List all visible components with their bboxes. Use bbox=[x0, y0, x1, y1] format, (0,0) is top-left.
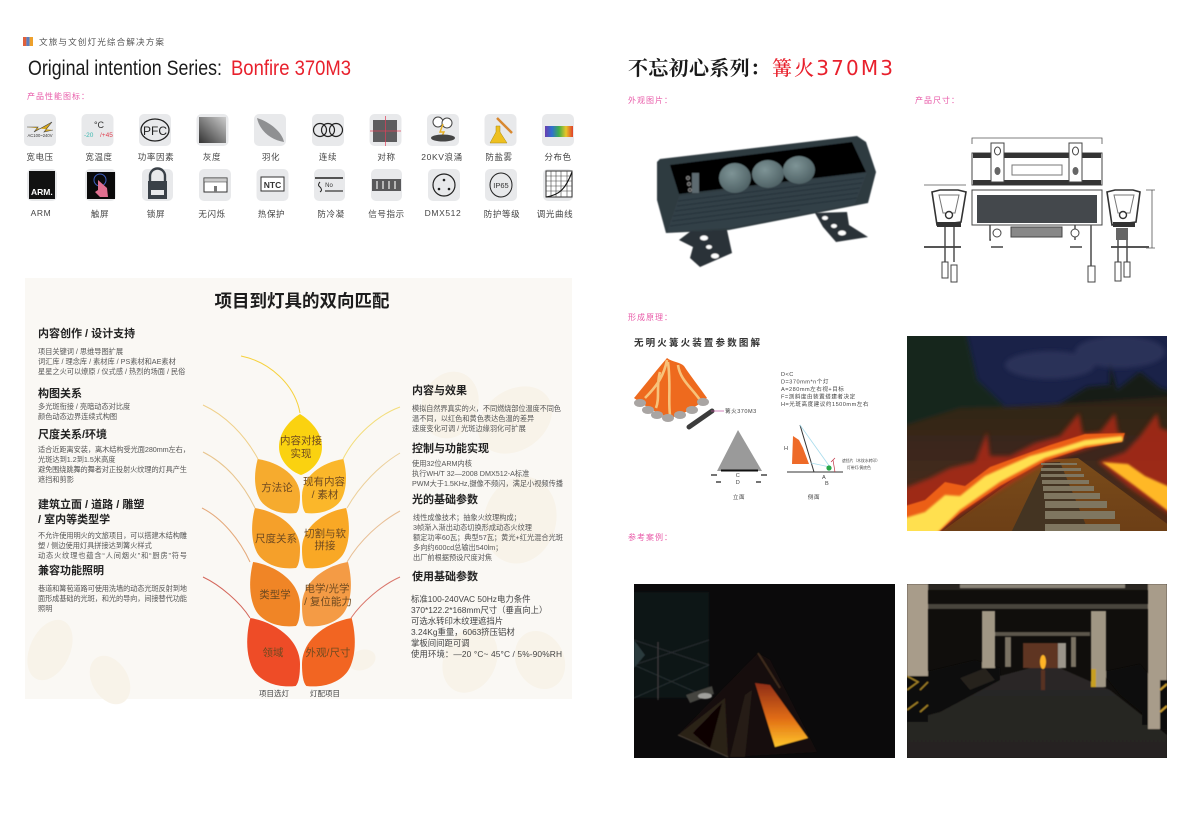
section label: appearance: 外观图片： bbox=[628, 95, 673, 105]
icon: wide temperature: /+45 bbox=[100, 132, 113, 139]
icon labels: 信号指示 bbox=[368, 209, 405, 219]
right text column: 3帧渐入渐出动态切换形成动态火纹理 bbox=[413, 523, 532, 532]
right text column: 370*122.2*168mm尺寸（垂直向上） bbox=[411, 605, 547, 615]
icon labels: DMX512 bbox=[425, 208, 461, 218]
icon: symmetry bbox=[370, 116, 401, 146]
right text column: 执行WH/T 32—2008 DMX512-A标准 bbox=[412, 469, 529, 478]
right text column: 控制与功能实现 bbox=[412, 441, 489, 455]
icon: DMX512 bbox=[433, 174, 455, 196]
wheat labels: 领域 bbox=[262, 646, 284, 659]
right text column: 标准100-240VAC 50Hz电力条件 bbox=[411, 594, 530, 604]
icon labels: 热保护 bbox=[258, 209, 285, 219]
side section diagram: H bbox=[784, 446, 789, 452]
wheat labels: 拼接 bbox=[314, 539, 336, 552]
icon labels: 防盐雾 bbox=[485, 152, 513, 162]
left side view bbox=[924, 185, 966, 282]
wheat labels: / 复位能力 bbox=[304, 595, 352, 608]
parameter notes: A=280mm左右视+目标 bbox=[781, 385, 844, 393]
section label: reference cases: 参考案例： bbox=[628, 532, 673, 542]
icon labels: 宽电压 bbox=[26, 152, 54, 162]
photo: fire road bbox=[907, 336, 1167, 531]
icon labels: ARM bbox=[31, 208, 51, 218]
icon: dimming curve bbox=[546, 171, 572, 197]
wheat labels: 切割与软 bbox=[304, 527, 346, 540]
left text column: 构图关系 bbox=[38, 386, 82, 400]
icon labels: 对称 bbox=[377, 152, 396, 162]
right text column: 使用32位ARM内核 bbox=[412, 459, 472, 468]
icon labels: 羽化 bbox=[262, 152, 280, 162]
left text column: 多光斑衔接 / 亮暗动态对比度 bbox=[38, 402, 130, 411]
product photo: lamp bbox=[657, 136, 876, 267]
wheat diagram bbox=[202, 356, 400, 698]
wheat labels: 电学/光学 bbox=[305, 582, 349, 595]
elevation triangle: C bbox=[736, 473, 740, 479]
parameter notes: D=370mm*n个灯 bbox=[781, 378, 829, 386]
side section diagram bbox=[784, 425, 880, 501]
icon labels: 调光曲线 bbox=[537, 209, 573, 219]
right text column: 出厂前根据预设尺度对焦 bbox=[413, 553, 492, 562]
section label: dimensions: 产品尺寸： bbox=[915, 95, 960, 105]
wheat labels: 外观/尺寸 bbox=[306, 646, 350, 659]
icon labels: 灰度 bbox=[203, 152, 221, 162]
icon: anti condensation bbox=[315, 178, 343, 192]
side section diagram: B bbox=[825, 481, 829, 487]
wheat labels: 项目选灯 bbox=[259, 688, 289, 698]
left text column: 避免围绕跳舞的舞者对正投射火纹理的灯具产生 bbox=[38, 465, 187, 474]
wheat labels: 现有内容 bbox=[303, 475, 345, 488]
right text column: 模拟自然界真实的火，不同燃烧部位温度不同色 bbox=[412, 404, 561, 413]
side section diagram: 遮挡片（木纹水转印） bbox=[842, 458, 880, 463]
right text column: 使用基础参数 bbox=[412, 569, 478, 583]
elevation triangle bbox=[711, 430, 767, 501]
parameter notes: H=光斑高度建议约1500mm左右 bbox=[781, 400, 869, 408]
parameter notes: D<C bbox=[781, 372, 794, 378]
icon labels: 分布色 bbox=[544, 152, 572, 162]
icon labels: 无闪烁 bbox=[198, 209, 226, 219]
right text column: 光的基础参数 bbox=[412, 492, 478, 506]
right text column: 速度变化可调 / 光斑边缘羽化可扩展 bbox=[412, 424, 526, 433]
icon: power factor bbox=[141, 119, 169, 141]
wheat leaves bbox=[247, 414, 355, 686]
icon labels: 功率因素 bbox=[138, 152, 174, 162]
left text column: 巷道和篝苞道路可使用洗墙的动态光斑反射到地 bbox=[38, 584, 187, 593]
title: english: Original intention Series: bbox=[28, 57, 222, 80]
top view bbox=[972, 138, 1102, 185]
icon: wide temperature bbox=[84, 120, 113, 139]
icon: power factor: PFC bbox=[143, 124, 167, 138]
title: english: Bonfire 370M3 bbox=[231, 57, 351, 80]
left text column: 颜色动态边界连续式构图 bbox=[38, 412, 117, 421]
icon: anti condensation: No bbox=[325, 183, 333, 189]
icon labels: 防冷凝 bbox=[317, 209, 345, 219]
left text column: 项目关键词 / 思维导图扩展 bbox=[38, 347, 123, 356]
left text column: 星星之火可以燎原 / 仪式感 / 热烈的场面 / 民俗 bbox=[38, 367, 185, 376]
icon: ARM bbox=[29, 171, 55, 199]
right text column: 温不同，以红色和黄色表达色温的差异 bbox=[412, 414, 534, 423]
left text column: 光斑达到1.2到1.5米高度 bbox=[38, 455, 115, 464]
left text column: 遮挡和剪影 bbox=[38, 475, 74, 484]
wheat labels: / 素材 bbox=[312, 488, 339, 501]
left text column bbox=[38, 326, 190, 613]
flames bbox=[900, 413, 1172, 535]
left text column: 词汇库 / 理念库 / 素材库 / PS素材和AE素材 bbox=[38, 357, 176, 366]
icon labels: 锁屏 bbox=[147, 209, 165, 219]
right text column bbox=[411, 383, 563, 659]
wheat labels: 类型学 bbox=[259, 588, 291, 601]
icon labels: 连续 bbox=[319, 152, 337, 162]
icon: touch bbox=[87, 172, 115, 199]
icon: colour distribution bbox=[545, 126, 573, 137]
wheat labels: 尺度关系 bbox=[255, 532, 297, 545]
icon: wide voltage: AC100~240V bbox=[27, 133, 53, 138]
icon labels bbox=[26, 152, 573, 219]
left text column: 面形成基础的光斑，和光的导向，间接替代功能 bbox=[38, 594, 187, 603]
icon: NTC bbox=[261, 177, 284, 191]
icon: no flicker bbox=[204, 178, 227, 192]
title: chinese bbox=[628, 56, 893, 80]
fire cone illustration bbox=[634, 358, 757, 427]
side section diagram: 灯带灯/黄底色 bbox=[847, 465, 871, 470]
parameter notes: F=测斜度由装置搭建者决定 bbox=[781, 392, 856, 400]
diagram title: 无明火篝火装置参数图解 bbox=[634, 337, 760, 349]
elevation triangle: D bbox=[736, 480, 740, 486]
right text column: 使用环境：—20 °C~ 45°C / 5%-90%RH bbox=[411, 649, 562, 659]
icon labels: 20KV浪涌 bbox=[421, 152, 463, 162]
left text column: 不允许使用明火的文旅项目，可以搭建木结构雕 bbox=[38, 531, 187, 540]
left text column: 适合近距离安装，离木结构受光面280mm左右， bbox=[38, 445, 190, 454]
right side view bbox=[1107, 190, 1155, 281]
side section diagram: A bbox=[822, 475, 826, 481]
right text column: 额定功率60瓦；典型57瓦；黄光+红光混合光斑 bbox=[413, 533, 563, 542]
right text column: PWM大于1.5KHz,摄像不频闪，满足小视频传播 bbox=[412, 479, 563, 488]
icon labels: 触屏 bbox=[91, 209, 109, 219]
icon labels: 宽温度 bbox=[85, 152, 113, 162]
wheat labels: 实现 bbox=[290, 447, 312, 460]
right text column: 线性成像技术；抽象火纹理构成； bbox=[413, 513, 521, 522]
fire cone illustration: 篝火370M3 bbox=[725, 407, 757, 415]
icon: ARM: ARM. bbox=[31, 187, 53, 197]
photo: underground car park bbox=[907, 584, 1167, 758]
panel: two-way matching bbox=[18, 278, 574, 712]
left text column: 兼容功能照明 bbox=[38, 563, 104, 577]
header tag: 文旅与文创灯光综合解决方案 bbox=[39, 36, 164, 47]
left text column: 动态火纹理也蕴含“人间烟火”和“厨房”符号 bbox=[38, 551, 187, 560]
wheat labels bbox=[255, 434, 352, 698]
icon: continuous rings bbox=[314, 124, 342, 136]
photo: pyramid bonfire bbox=[634, 584, 895, 758]
right text column: 可选水转印木纹理遮挡片 bbox=[411, 616, 503, 626]
dimension drawing bbox=[924, 138, 1155, 282]
left text column: 照明 bbox=[38, 604, 52, 613]
icon: wide voltage bbox=[27, 122, 53, 138]
title: chinese: 不忘初心系列： bbox=[628, 57, 770, 80]
front view bbox=[972, 190, 1102, 282]
right text column: 掌板间间距可调 bbox=[411, 638, 470, 648]
icon grid: performance icons bbox=[24, 114, 574, 219]
panel heading: 项目到灯具的双向匹配 bbox=[214, 291, 390, 311]
left text column: / 室内等类型学 bbox=[38, 512, 110, 526]
icon: NTC: NTC bbox=[264, 180, 281, 190]
elevation triangle: 立面 bbox=[733, 493, 745, 501]
right text column: 内容与效果 bbox=[412, 383, 467, 397]
section label: formation principle: 形成原理： bbox=[628, 312, 673, 322]
left text column: 内容创作 / 设计支持 bbox=[38, 326, 135, 340]
wheat labels: 方法论 bbox=[261, 481, 293, 494]
side section diagram: 侧面 bbox=[808, 493, 820, 501]
right text column: 多向约600cd总输出540lm； bbox=[413, 543, 502, 552]
icon: IP65 bbox=[490, 173, 512, 197]
icon: lock bbox=[148, 168, 167, 199]
icon: IP65: IP65 bbox=[493, 181, 509, 190]
parameter notes bbox=[781, 372, 869, 408]
icon: salt spray bbox=[490, 118, 512, 143]
left text column: 塑 / 侧边使用灯具拼接达到篝火样式 bbox=[38, 541, 152, 550]
wheat labels: 灯配项目 bbox=[310, 688, 340, 698]
icon: wide temperature: -20 bbox=[84, 132, 94, 139]
icon: signal bbox=[372, 179, 401, 191]
title: chinese: 篝火370M3 bbox=[772, 56, 893, 80]
wheat stems bbox=[202, 356, 400, 618]
left text column: 建筑立面 / 道路 / 雕塑 bbox=[38, 497, 144, 511]
icon labels: 防护等级 bbox=[484, 209, 520, 219]
icon: wide temperature: °C bbox=[94, 120, 105, 130]
icon: surge bbox=[431, 117, 455, 142]
section label: performance icons: 产品性能图标： bbox=[27, 91, 90, 101]
wheat labels: 内容对接 bbox=[280, 434, 322, 447]
icon: feather bbox=[257, 118, 284, 142]
right text column: 3.24Kg重量，6063挤压铝材 bbox=[411, 627, 515, 637]
principle diagram bbox=[634, 337, 880, 501]
left text column: 尺度关系/环境 bbox=[38, 427, 107, 441]
icon: grayscale bbox=[199, 117, 226, 143]
